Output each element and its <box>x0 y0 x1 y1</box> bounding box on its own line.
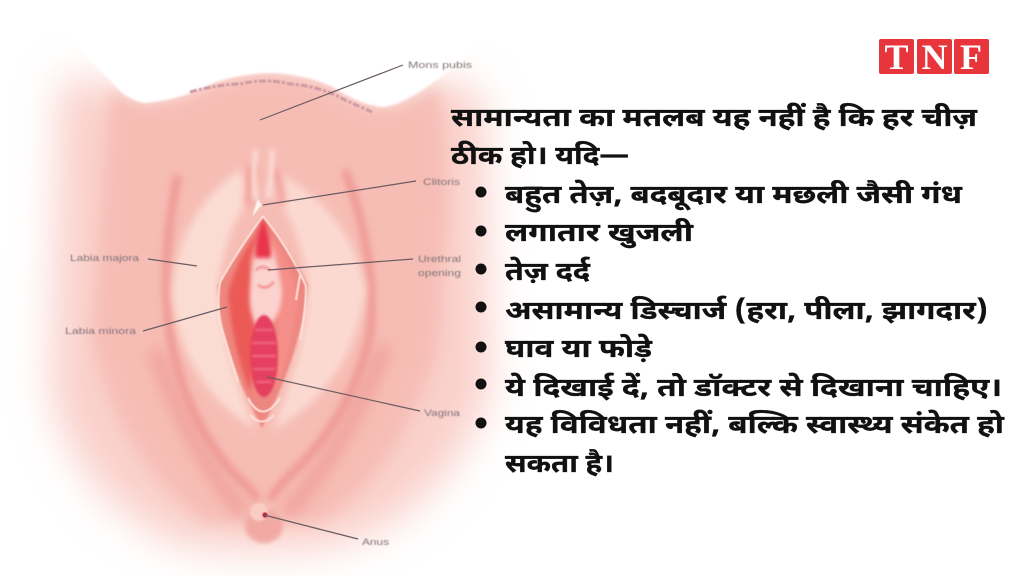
inner tissue <box>218 216 308 428</box>
warning signs list: सकता है। <box>505 449 614 483</box>
intro text: सामान्यता का मतलब यह नहीं है कि हर चीज़ <box>451 102 978 137</box>
outer fold shading <box>166 170 372 500</box>
TNF logo: T <box>884 37 909 77</box>
anatomical diagram <box>20 20 530 552</box>
top white notch <box>20 20 530 107</box>
warning signs list: बहुत तेज़, बदबूदार या मछली जैसी गंध <box>505 180 963 214</box>
midline and lower detail <box>260 428 266 490</box>
TNF logo <box>879 37 989 77</box>
anatomy labels: Labia minora <box>65 326 137 337</box>
soft tissue base <box>50 73 490 552</box>
opening <box>250 315 278 397</box>
central mottled tissue <box>250 226 282 330</box>
hood folds <box>248 165 282 205</box>
warning signs list: घाव या फोड़े <box>505 334 653 368</box>
leader lines <box>143 65 420 539</box>
warning signs list: यह विविधता नहीं, बल्कि स्वास्थ्य संकेत हो <box>505 409 1006 444</box>
right inner fold <box>268 232 298 392</box>
warning signs list <box>476 180 1006 483</box>
TNF logo: N <box>922 37 948 77</box>
clitoral hood highlight <box>253 200 261 215</box>
intro text <box>451 102 978 175</box>
hairline edge <box>190 81 372 112</box>
anatomy labels: opening <box>418 268 461 279</box>
anatomy labels: Labia majora <box>70 253 140 264</box>
anatomy labels: Vagina <box>424 408 461 419</box>
bullet markers <box>476 186 486 428</box>
warning signs list: असामान्य डिस्चार्ज (हरा, पीला, झागदार) <box>505 295 988 330</box>
left inner fold <box>228 232 258 392</box>
anatomy labels <box>65 60 472 548</box>
warning signs list: तेज़ दर्द <box>505 256 591 291</box>
warning signs list: ये दिखाई दें, तो डॉक्टर से दिखाना चाहिए। <box>505 372 1002 407</box>
warning signs list: लगातार खुजली <box>505 218 695 252</box>
anatomy labels: Urethral <box>418 254 461 265</box>
TNF logo: F <box>960 37 982 77</box>
labia majora light areas <box>172 170 255 430</box>
anatomy labels: Anus <box>362 537 389 548</box>
intro text: ठीक हो। यदि— <box>451 140 629 175</box>
anatomy labels: Clitoris <box>423 177 460 188</box>
inner pale outlines <box>218 216 306 422</box>
anatomy labels: Mons pubis <box>408 60 472 71</box>
